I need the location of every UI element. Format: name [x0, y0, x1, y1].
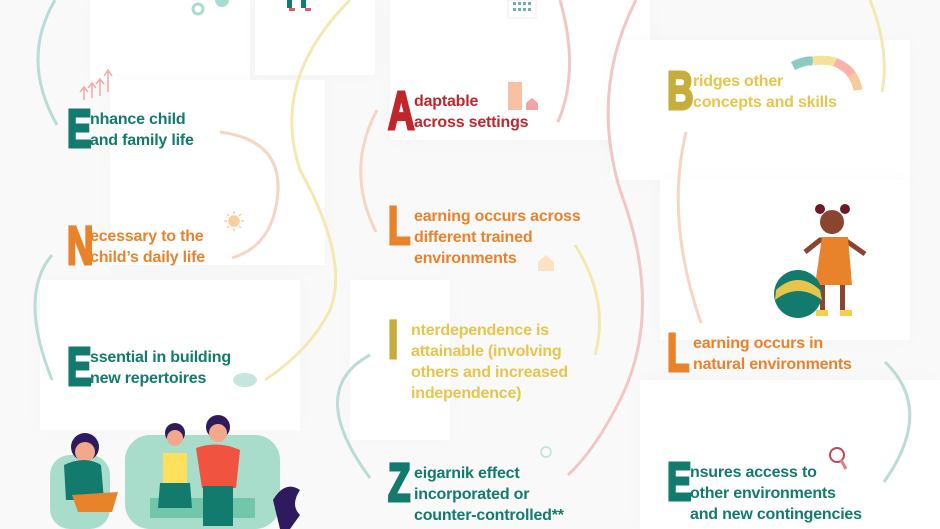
item: Bridges	[667, 61, 837, 121]
item: Learning natural: L	[667, 323, 689, 383]
item: Learning natural: natural environments	[693, 356, 852, 373]
item: Enhance	[67, 99, 194, 159]
item: Bridges: ridges other	[693, 73, 783, 90]
item: Essential: E	[67, 337, 92, 397]
item: Interdependence: attainable (involving	[411, 343, 562, 360]
item: Adaptable: across settings	[414, 114, 528, 131]
item: Adaptable: daptable	[414, 93, 478, 110]
item: Learning trained: different trained	[414, 229, 532, 246]
item: Learning trained: L	[388, 196, 410, 256]
item: Interdependence: others and increased	[411, 364, 568, 381]
item: Ensures	[667, 452, 862, 523]
item: Learning trained	[388, 196, 581, 267]
item: Interdependence: I	[388, 310, 398, 370]
item: Necessary: N	[67, 216, 94, 276]
item: Ensures: other environments	[690, 485, 836, 502]
item: Bridges: B	[667, 61, 694, 121]
item: Learning trained: earning occurs across	[414, 208, 581, 225]
item: Enhance: and family life	[90, 132, 194, 149]
item: Adaptable	[388, 81, 528, 141]
item: Learning trained: environments	[414, 250, 517, 267]
item: Necessary: child’s daily life	[90, 249, 205, 266]
item: Zeigarnik	[388, 453, 564, 524]
item: Essential: ssential in building	[90, 349, 231, 366]
item: Necessary: ecessary to the	[90, 228, 204, 245]
item: Interdependence	[388, 310, 568, 402]
item: Essential	[67, 337, 231, 397]
item: Zeigarnik: incorporated or	[414, 486, 529, 503]
item: Adaptable: A	[388, 81, 415, 141]
item: Zeigarnik: counter-controlled**	[414, 507, 564, 524]
item: Zeigarnik: eigarnik effect	[414, 465, 520, 482]
item: Enhance: E	[67, 99, 92, 159]
item: Interdependence: nterdependence is	[411, 322, 549, 339]
item: Learning natural: earning occurs in	[693, 335, 823, 352]
item: Interdependence: independence)	[411, 385, 521, 402]
item: Essential: new repertoires	[90, 370, 206, 387]
item: Necessary	[67, 216, 205, 276]
item: Bridges: concepts and skills	[693, 94, 837, 111]
item: Zeigarnik: Z	[388, 453, 410, 513]
item: Ensures: E	[667, 452, 692, 512]
item: Ensures: nsures access to	[690, 464, 817, 481]
item: Ensures: and new contingencies	[690, 506, 862, 523]
item: Enhance: nhance child	[90, 111, 185, 128]
item: Learning natural	[667, 323, 852, 383]
